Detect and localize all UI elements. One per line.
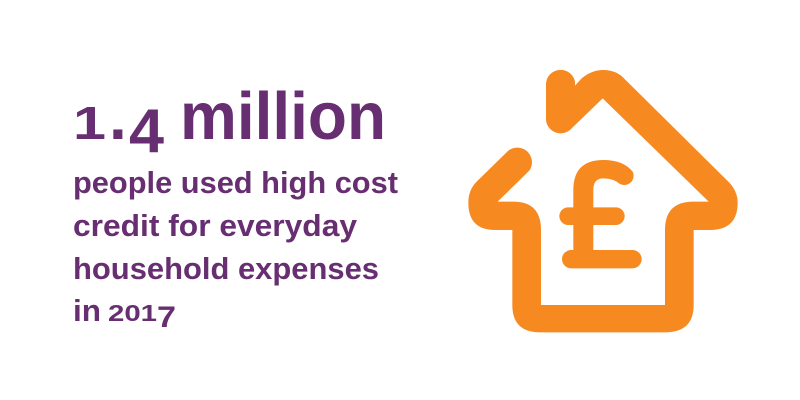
headline: 1.4 million: million <box>180 79 386 154</box>
description text: credit for everyday <box>73 208 358 243</box>
description text: 201 <box>108 300 157 326</box>
icon: house outline with chimney <box>468 70 738 332</box>
headline: 1.4 million: . <box>109 81 127 153</box>
description text: 7 <box>157 301 176 334</box>
headline: 1.4 million: 1 <box>73 97 106 149</box>
description text: household expenses <box>73 251 379 286</box>
icon: house with pound sign <box>468 70 738 332</box>
headline: 1.4 million <box>73 79 386 166</box>
headline: 1.4 million: 4 <box>129 97 165 166</box>
description text: people used high cost <box>73 165 398 200</box>
icon: pound sign <box>559 160 642 268</box>
description text <box>73 165 398 334</box>
description text: in <box>73 293 101 328</box>
